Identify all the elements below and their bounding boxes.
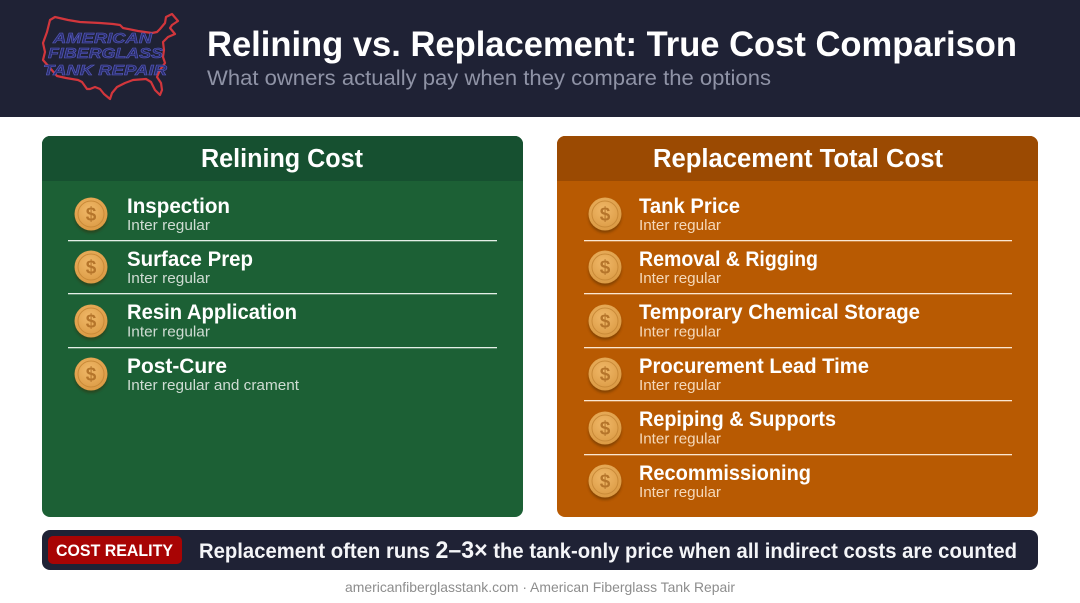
item: inspection: Inspection [127, 195, 230, 218]
callout: cost reality [42, 530, 1038, 570]
panel: replacement total cost [557, 136, 1038, 517]
item: procurement lead time [588, 355, 869, 394]
panel: relining cost [42, 136, 523, 517]
badge: cost reality: COST REALITY [56, 541, 174, 560]
item: procurement lead time: Inter regular [639, 378, 721, 394]
item: procurement lead time: $ [600, 364, 611, 386]
item: temporary chemical storage: Inter regular [639, 324, 721, 340]
item: procurement lead time: Procurement Lead Time [639, 355, 869, 378]
item: resin application [74, 301, 297, 340]
item: surface prep: Surface Prep [127, 248, 253, 271]
item: resin application: Resin Application [127, 301, 297, 324]
item: inspection [74, 195, 230, 234]
item: removal and rigging [588, 248, 818, 287]
item: resin application: Inter regular [127, 324, 210, 340]
item: post-cure: $ [86, 364, 97, 386]
item: inspection: Inter regular [127, 218, 210, 234]
header band [0, 0, 1080, 117]
item: recommissioning: Recommissioning [639, 462, 811, 485]
item: repiping and supports [588, 408, 836, 448]
item: surface prep: Inter regular [127, 271, 210, 287]
item: surface prep: $ [86, 258, 97, 278]
title: Relining vs. Replacement: True Cost Comparison [207, 25, 1017, 64]
item: tank price: $ [600, 204, 611, 226]
item: tank price [588, 195, 740, 234]
logo: American Fiberglass Tank Repair: FIBERGLASS [48, 45, 163, 62]
item: inspection: $ [86, 204, 97, 226]
item: temporary chemical storage [588, 301, 920, 340]
item: repiping and supports: $ [600, 418, 611, 440]
item: post-cure [74, 355, 299, 394]
heading: replacement total cost: Replacement Total Cost [653, 145, 943, 173]
item: tank price: Inter regular [639, 218, 721, 234]
heading: relining cost: Relining Cost [201, 145, 363, 173]
item: repiping and supports: Repiping & Supports [639, 408, 836, 431]
item: post-cure: Post-Cure [127, 355, 227, 378]
item: recommissioning: $ [600, 472, 611, 492]
logo: American Fiberglass Tank Repair [43, 14, 178, 99]
item: recommissioning [588, 462, 811, 501]
item: removal and rigging: Inter regular [639, 271, 721, 287]
item: recommissioning: Inter regular [639, 485, 721, 501]
logo: American Fiberglass Tank Repair: AMERICAN [52, 30, 153, 47]
logo: American Fiberglass Tank Repair: TANK REPAIR [43, 62, 167, 79]
item: temporary chemical storage: $ [600, 312, 611, 332]
badge: cost reality [48, 536, 182, 564]
subtitle: What owners actually pay when they compare the options [207, 67, 771, 90]
callout text: Replacement often runs 2–3× the tank-only price when all indirect costs are counted [199, 537, 1017, 564]
item: tank price: Tank Price [639, 195, 740, 218]
item: resin application: $ [86, 312, 97, 332]
item: temporary chemical storage: Temporary Chemical Storage [639, 301, 920, 324]
item: removal and rigging: $ [600, 258, 611, 278]
item: surface prep [74, 248, 253, 287]
item: repiping and supports: Inter regular [639, 432, 721, 448]
footer: americanfiberglasstank.com · American Fiberglass Tank Repair [345, 579, 735, 595]
item: post-cure: Inter regular and crament [127, 378, 299, 394]
item: removal and rigging: Removal & Rigging [639, 248, 818, 271]
